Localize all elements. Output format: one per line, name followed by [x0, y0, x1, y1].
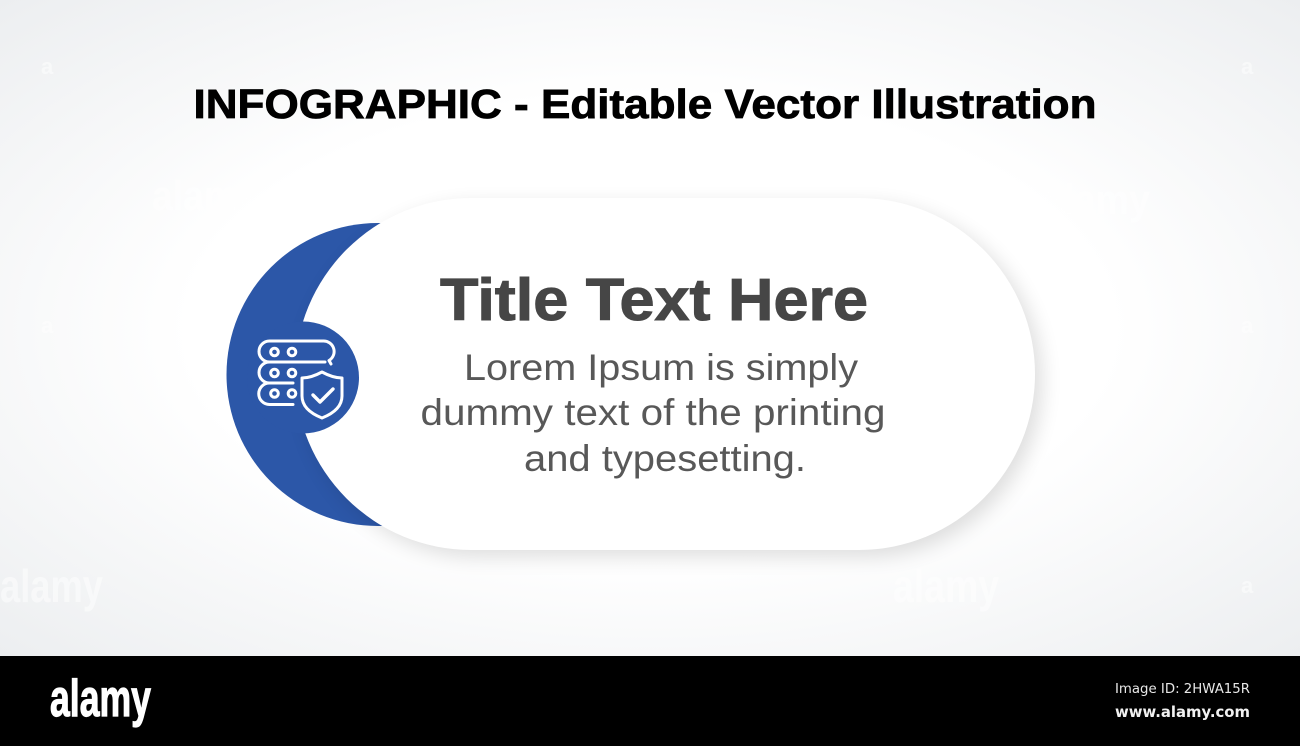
footer url: www.alamy.com — [1115, 703, 1250, 721]
watermarks: a — [41, 313, 54, 338]
card body text: and typesetting. — [524, 438, 806, 479]
card body text: dummy text of the printing — [420, 392, 886, 433]
watermarks: alamy — [152, 172, 259, 219]
watermarks: alamy — [1043, 176, 1151, 223]
card body text: Lorem Ipsum is simply — [464, 347, 859, 388]
card body text — [420, 347, 886, 479]
footer image id: Image ID: 2HWA15R — [1115, 681, 1250, 697]
blue crescent — [226, 223, 530, 526]
icon badge — [247, 322, 359, 434]
footer bar — [0, 656, 1300, 746]
footer logo: alamy — [50, 670, 151, 728]
card heading: Title Text Here — [440, 267, 868, 333]
white pill card — [295, 198, 1035, 550]
watermarks: a — [41, 54, 54, 79]
card shadow — [302, 205, 1042, 557]
watermarks: a — [1241, 313, 1254, 338]
watermarks — [0, 54, 1254, 612]
watermarks: a — [1241, 54, 1254, 79]
icon: server with shield — [259, 341, 342, 418]
watermarks: alamy — [893, 560, 999, 612]
watermarks: alamy — [0, 560, 103, 612]
title: INFOGRAPHIC - Editable Vector Illustration — [194, 81, 1096, 127]
watermarks: a — [1241, 573, 1254, 598]
